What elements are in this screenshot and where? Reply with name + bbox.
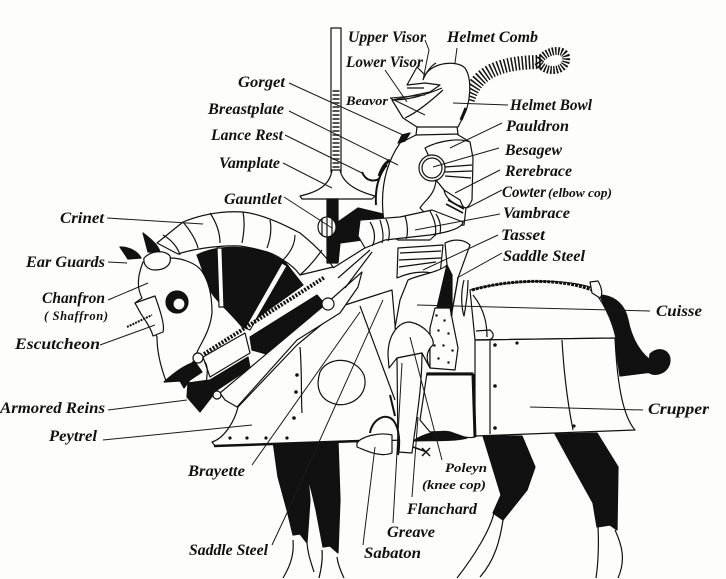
eye guard — [166, 291, 188, 313]
label: Gorget: Gorget — [238, 74, 286, 91]
sabaton foot — [357, 434, 392, 455]
vambrace and gauntlet — [358, 210, 463, 248]
label: Poleyn: Poleyn — [445, 461, 487, 475]
label: knee cop: (knee cop) — [422, 478, 486, 492]
besagew — [419, 155, 445, 181]
label: Upper Visor: Upper Visor — [348, 29, 427, 46]
label: Saddle Steel upper: Saddle Steel — [503, 248, 586, 265]
label: Greave: Greave — [387, 524, 435, 541]
poleyn knee — [388, 322, 433, 368]
rein band — [220, 272, 362, 407]
label: Armored Reins: Armored Reins — [0, 400, 105, 417]
ear guards — [144, 252, 170, 270]
black saddle wedge — [437, 265, 452, 315]
label: Helmet Bowl: Helmet Bowl — [509, 97, 593, 114]
label: Besagew: Besagew — [504, 142, 563, 159]
saddle skirt and flanchard — [413, 373, 475, 441]
spur — [413, 447, 430, 456]
pauldron — [425, 140, 473, 208]
label: Lower Visor: Lower Visor — [345, 54, 424, 71]
peytrel boss — [318, 360, 365, 405]
label: Chanfron: Chanfron — [42, 290, 105, 307]
label: Peytrel: Peytrel — [49, 428, 98, 445]
horse lower neck black — [250, 295, 330, 355]
torso breastplate — [379, 130, 472, 240]
horse neck black — [197, 247, 303, 328]
rein chain — [204, 277, 325, 354]
label: Pauldron: Pauldron — [506, 118, 569, 135]
label: Lance Rest: Lance Rest — [210, 127, 284, 144]
saddle stippled pad — [430, 308, 458, 370]
label: Cuisse: Cuisse — [656, 303, 702, 320]
label: Shaffron: ( Shaffron) — [44, 309, 108, 323]
rump rope — [472, 281, 602, 298]
horse front legs — [273, 441, 344, 578]
label: Brayette: Brayette — [187, 463, 245, 480]
vamplate — [300, 170, 375, 199]
label: Saddle Steel lower: Saddle Steel — [189, 542, 269, 559]
label: Flanchard: Flanchard — [406, 501, 477, 518]
escutcheon plate — [127, 296, 163, 336]
label: Crupper: Crupper — [648, 401, 710, 418]
illustration: armored knight on horse — [120, 28, 670, 578]
armored reins black — [187, 357, 250, 412]
fauld and tassets — [397, 240, 470, 312]
rerebrace and cowter — [420, 180, 466, 228]
lance grip and hand shadow — [327, 199, 385, 263]
label: Ear Guards: Ear Guards — [25, 254, 105, 271]
chanfron head plate — [135, 258, 212, 388]
label: Rerebrace: Rerebrace — [504, 163, 572, 180]
label: Breastplate: Breastplate — [207, 101, 284, 118]
lance rest — [362, 165, 387, 205]
label: Vambrace: Vambrace — [503, 205, 570, 222]
leader lines — [100, 40, 650, 545]
plume — [468, 51, 566, 100]
label: Helmet Comb: Helmet Comb — [446, 29, 538, 46]
lance shaft — [331, 28, 341, 172]
saddle cantle — [473, 295, 493, 340]
bridle rings — [193, 298, 334, 399]
label: elbow cop: (elbow cop) — [548, 186, 612, 200]
label: Crinet: Crinet — [60, 210, 105, 227]
gorget — [398, 126, 458, 143]
label: Sabaton: Sabaton — [364, 545, 421, 562]
horse hind legs — [457, 433, 622, 578]
white lower neck panel — [203, 333, 250, 377]
stirrup — [370, 395, 399, 455]
label: Escutcheon: Escutcheon — [14, 336, 100, 353]
greave lower leg — [397, 353, 422, 453]
label: Vamplate: Vamplate — [219, 155, 280, 172]
gauntlet knob — [318, 217, 336, 237]
crupper plate — [475, 338, 635, 436]
peytrel chest plate — [212, 290, 405, 446]
label: Gauntlet: Gauntlet — [224, 191, 283, 208]
label: Tasset: Tasset — [501, 227, 546, 244]
horse tail — [600, 295, 670, 376]
horse ears — [120, 233, 160, 259]
label: Cowter: Cowter — [502, 184, 547, 201]
helmet — [392, 63, 470, 127]
cuisse thigh — [395, 265, 447, 368]
saddle steel strap — [451, 278, 468, 316]
label: Beavor: Beavor — [345, 94, 388, 108]
crinet — [157, 212, 333, 330]
horse rump and crupper top — [470, 281, 616, 340]
thin reins — [333, 246, 372, 288]
